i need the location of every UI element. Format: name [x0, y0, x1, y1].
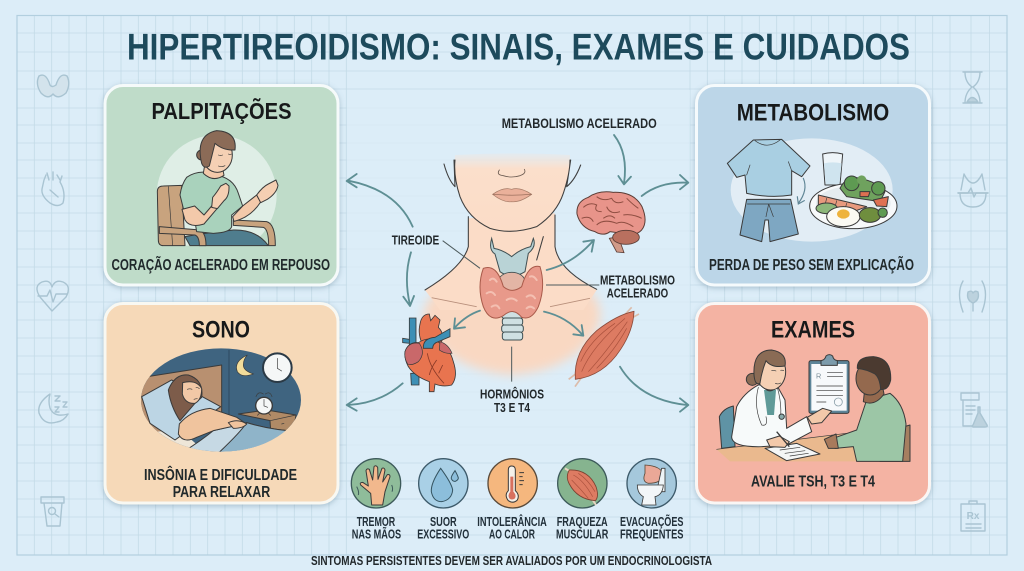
symptom: tremor nas mãos: NAS MÃOS [352, 526, 401, 542]
side icon: hourglass [963, 72, 982, 103]
text: Rx [967, 511, 980, 522]
symptom: evacuações frequentes: FREQUENTES [620, 528, 684, 542]
symptom: suor excessivo [417, 459, 469, 542]
symptom: evacuações frequentes [620, 459, 684, 542]
symptom: fraqueza muscular: MUSCULAR [556, 528, 608, 542]
label: hormônios t3 e t4: T3 E T4 [494, 400, 531, 415]
label: metabolismo acelerado (side) [600, 272, 675, 300]
heading: palpitações: PALPITAÇÕES [152, 97, 292, 124]
illustration: doctor and patient: R [816, 371, 821, 380]
trachea [502, 308, 523, 340]
side icon: body with thyroid [960, 281, 986, 312]
icon: heart [403, 314, 455, 392]
label: tireoide: TIREOIDE [392, 234, 439, 248]
title: HIPERTIREOIDISMO: SINAIS, EXAMES E CUIDADOS [127, 26, 910, 68]
symptom: fraqueza muscular [556, 459, 608, 542]
icon: brain [577, 192, 645, 253]
symptom: suor excessivo: SUOR [430, 515, 457, 529]
face [493, 169, 532, 202]
panel: sono [105, 304, 338, 503]
symptom: intolerância ao calor [477, 459, 547, 542]
label: metabolismo acelerado (side): METABOLISMO [600, 272, 675, 287]
heading: metabolismo: METABOLISMO [737, 100, 889, 127]
symptom: tremor nas mãos: TREMOR [357, 515, 395, 529]
side icon: cup with magnifier [41, 497, 64, 526]
symptom: evacuações frequentes: EVACUAÇÕES [620, 514, 684, 529]
symptom: intolerância ao calor: INTOLERÂNCIA [477, 514, 547, 529]
arrows from thyroid [347, 135, 688, 412]
heading: exames: EXAMES [771, 317, 855, 344]
label: metabolismo acelerado (top): METABOLISMO ACELERADO [502, 115, 657, 131]
side icon: lab jar and flask [961, 393, 987, 427]
side icon: torso with pulse [958, 174, 988, 207]
symptom: suor excessivo: EXCESSIVO [417, 528, 469, 542]
illustration: clothes and plate [727, 138, 897, 242]
leader lines [443, 241, 599, 382]
side icon: heart [42, 172, 64, 206]
panel: metabolismo [696, 86, 930, 285]
central anatomy diagram [347, 135, 688, 412]
panel: palpitações [105, 86, 338, 285]
footer note: SINTOMAS PERSISTENTES DEVEM SER AVALIADOS POR UM ENDOCRINOLOGISTA [311, 554, 712, 568]
side icon: heart with pulse [37, 281, 68, 311]
label: metabolismo acelerado (side): ACELERADO [607, 286, 668, 300]
label: hormônios t3 e t4 [480, 386, 544, 415]
illustration: doctor and patient [717, 350, 910, 461]
caption: PARA RELAXAR [173, 484, 271, 501]
illustration: person with hand on chest [157, 131, 278, 255]
side icon: thyroid [37, 75, 69, 97]
symptom row [351, 459, 684, 542]
caption [144, 465, 297, 501]
thyroid gland [480, 238, 543, 318]
heading: sono: SONO [192, 317, 250, 344]
caption: INSÔNIA E DIFICULDADE [144, 465, 297, 484]
label: hormônios t3 e t4: HORMÔNIOS [480, 386, 544, 401]
side icon: prescription clipboard [961, 501, 985, 531]
caption: AVALIE TSH, T3 E T4 [751, 474, 875, 491]
panel: exames [696, 304, 930, 503]
icon: muscle [569, 307, 639, 387]
caption: CORAÇÃO ACELERADO EM REPOUSO [112, 254, 330, 274]
side icon: moon and zzz [39, 394, 68, 423]
illustration: woman awake in bed [141, 348, 301, 452]
symptom: fraqueza muscular: FRAQUEZA [557, 515, 608, 529]
caption: PERDA DE PESO SEM EXPLICAÇÃO [709, 256, 914, 274]
symptom: intolerância ao calor: AO CALOR [489, 528, 535, 542]
symptom: tremor nas mãos [351, 459, 401, 542]
